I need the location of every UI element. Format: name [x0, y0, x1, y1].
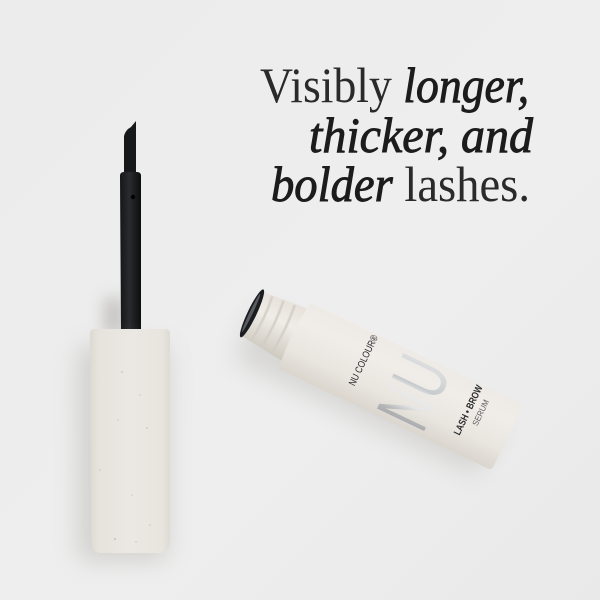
bottle body [311, 318, 523, 470]
headline line 2: thicker, and [309, 107, 534, 163]
cap [90, 329, 170, 553]
bottle shoulder [277, 302, 345, 386]
neck ridges [250, 295, 296, 353]
mouth inner [241, 293, 262, 333]
cap shadow [78, 345, 168, 561]
headline [260, 57, 534, 212]
headline line 1: Visibly longer, [260, 57, 529, 113]
bottle mouth [237, 288, 267, 339]
headline line 3: bolder lashes. [271, 156, 530, 212]
wand hole [131, 195, 135, 199]
product name: LASH • BROW [452, 383, 486, 437]
bottle neck threads [240, 289, 306, 361]
product: bottle [226, 280, 523, 481]
logo NU: NU [361, 343, 468, 442]
product: wand and cap [78, 121, 170, 561]
bottle shadow [233, 307, 502, 476]
brush tip [124, 121, 136, 172]
product type: SERUM [470, 398, 491, 427]
mouth ring [237, 288, 267, 339]
wand shadow [104, 298, 124, 334]
wand stem [120, 172, 141, 332]
brand label: NU COLOUR® [347, 333, 381, 388]
cap speckles [99, 371, 151, 543]
